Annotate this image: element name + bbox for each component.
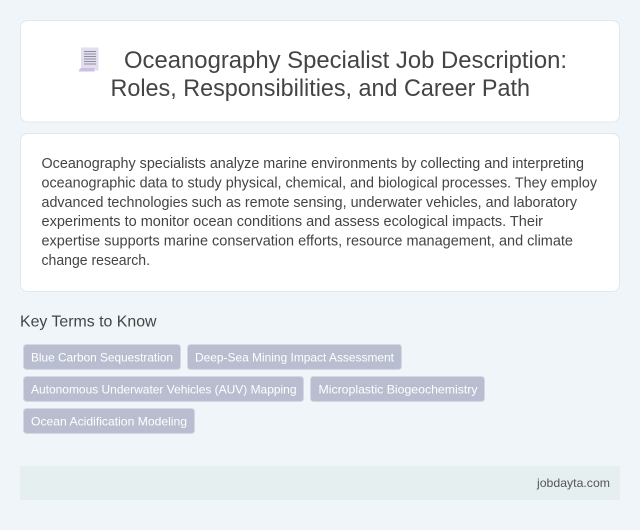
panel: title card xyxy=(20,20,620,122)
description text: experiments to monitor ocean conditions and assess ecological impacts. Their xyxy=(42,214,543,230)
description text: oceanographic data to study physical, chemical, and biological processes. They employ xyxy=(42,175,598,191)
tag: Ocean Acidification Modeling: Ocean Acidification Modeling xyxy=(31,414,187,428)
description text: expertise supports marine conservation efforts, resource management, and climate xyxy=(42,234,573,250)
title: Roles, Responsibilities, and Career Path xyxy=(110,75,530,102)
title: Oceanography Specialist Job Description: xyxy=(124,47,567,74)
title xyxy=(110,47,567,102)
description text: Oceanography specialists analyze marine environments by collecting and interpreting xyxy=(42,156,584,172)
tag: Blue Carbon Sequestration xyxy=(24,344,180,370)
tag: Blue Carbon Sequestration: Blue Carbon Sequestration xyxy=(31,350,173,364)
icon: paper scroll xyxy=(79,48,98,72)
footer bar xyxy=(20,466,620,500)
tag: Deep-Sea Mining Impact Assessment: Deep-Sea Mining Impact Assessment xyxy=(195,350,395,364)
tag: Ocean Acidification Modeling xyxy=(24,408,194,434)
description text xyxy=(42,156,598,269)
footer source: jobdayta.com xyxy=(536,476,610,490)
tag: Autonomous Underwater Vehicles (AUV) Mapping: Autonomous Underwater Vehicles (AUV) Mapping xyxy=(31,382,296,396)
tag: Microplastic Biogeochemistry: Microplastic Biogeochemistry xyxy=(318,382,478,396)
description text: advanced technologies such as remote sensing, underwater vehicles, and laboratory xyxy=(42,195,578,211)
description text: change research. xyxy=(42,253,150,269)
heading: key terms: Key Terms to Know xyxy=(20,314,157,330)
tag: Autonomous Underwater Vehicles (AUV) Mapping xyxy=(24,376,304,402)
tag: Microplastic Biogeochemistry xyxy=(310,376,484,402)
panel: description xyxy=(20,134,620,292)
tag: Deep-Sea Mining Impact Assessment xyxy=(188,344,402,370)
